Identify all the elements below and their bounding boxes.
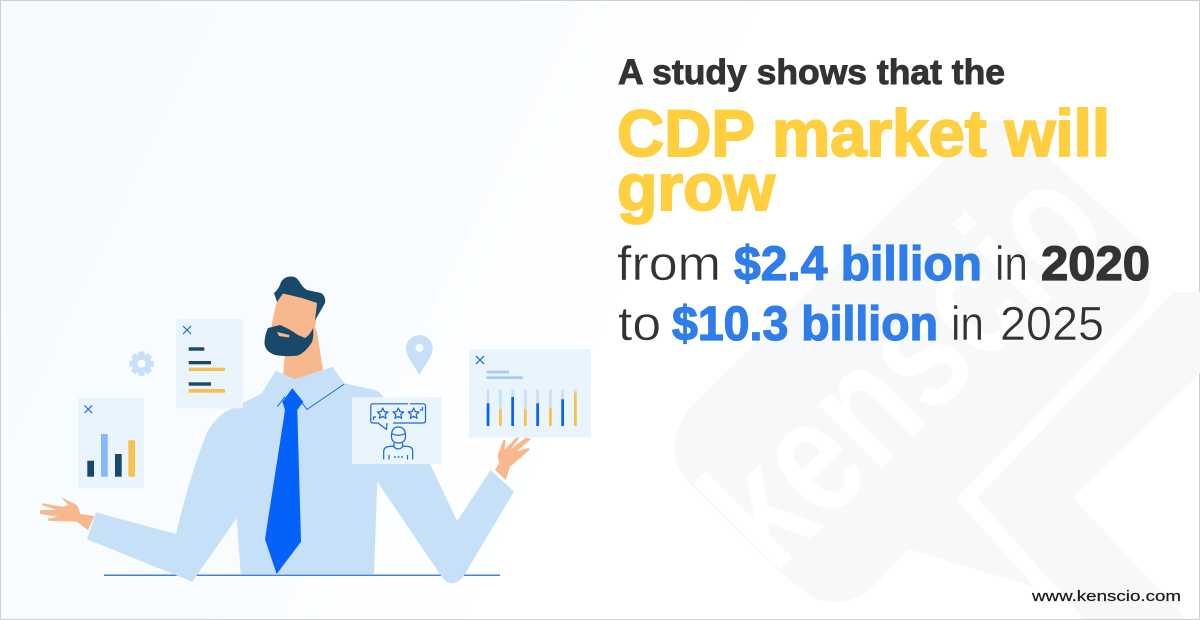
icon: location pin [406, 335, 433, 375]
collar lines [277, 384, 344, 410]
text: to 10.3 billion in 2025: 2025 [1000, 298, 1104, 351]
hair [274, 276, 325, 320]
icon: rating bubble [371, 404, 426, 430]
text: from 2.4 billion in 2020: from [617, 238, 721, 291]
heading: yellow headline: grow [617, 150, 776, 224]
heading: yellow headline [617, 96, 1110, 224]
text: to 10.3 billion in 2025 [618, 298, 1104, 351]
text: from 2.4 billion in 2020 [617, 238, 1150, 291]
website url: www.kenscio.com [1031, 588, 1181, 605]
panel: bar chart card [78, 398, 144, 488]
body: shirt [87, 367, 514, 583]
illustration: businessman with panels [40, 276, 531, 583]
text: from 2.4 billion in 2020: 2020 [1041, 238, 1150, 291]
heading: yellow headline: CDP market will [617, 96, 1110, 170]
text: from 2.4 billion in 2020: in [995, 238, 1028, 291]
beard [264, 325, 313, 356]
neck [283, 322, 323, 382]
panel: list card [176, 319, 243, 408]
text: from 2.4 billion in 2020: $2.4 billion [734, 238, 982, 291]
panel: column chart card [469, 349, 591, 438]
tie [265, 388, 303, 574]
text: to 10.3 billion in 2025: $10.3 billion [672, 298, 938, 351]
head [264, 276, 325, 356]
left hand [40, 497, 94, 530]
right hand [495, 437, 531, 480]
icon: person [384, 427, 413, 460]
icon: gear [129, 352, 154, 376]
mouth [277, 332, 290, 338]
panel: customer rating card [352, 397, 441, 464]
text: to 10.3 billion in 2025: to [618, 298, 661, 351]
baseline [104, 575, 500, 576]
text: to 10.3 billion in 2025: in [951, 298, 984, 351]
face [270, 292, 317, 356]
heading: intro line: A study shows that the [618, 53, 1005, 92]
